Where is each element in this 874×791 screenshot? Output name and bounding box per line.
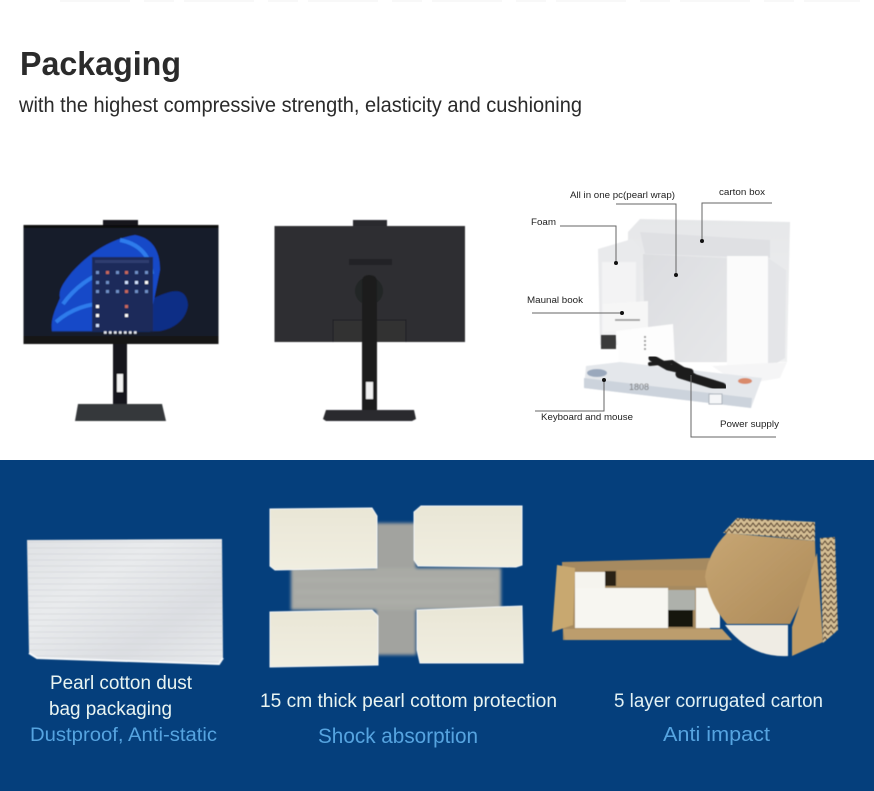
foam blocks bbox=[598, 239, 787, 385]
monitor back view bbox=[274, 220, 465, 421]
callout labels: Power supply bbox=[720, 419, 780, 429]
caption: 15 cm thick pearl cottom protection bbox=[260, 691, 557, 712]
start menu bbox=[92, 257, 153, 331]
callout labels: All in one pc(pearl wrap) bbox=[570, 190, 675, 200]
scan artefact strip bbox=[60, 0, 860, 2]
caption bbox=[30, 673, 217, 746]
item: corrugated carton bbox=[552, 518, 838, 746]
caption bbox=[614, 691, 823, 746]
callout labels: Foam bbox=[531, 217, 556, 227]
item: dust bag bbox=[27, 539, 223, 746]
screen bbox=[24, 225, 218, 344]
caption: Dustproof, Anti-static bbox=[30, 725, 217, 746]
wallpaper bbox=[52, 235, 188, 332]
stand base bbox=[323, 410, 416, 421]
callout labels: carton box bbox=[719, 187, 766, 197]
caption: bag packaging bbox=[49, 699, 172, 720]
carton box bbox=[628, 219, 790, 362]
pearl cotton bag bbox=[27, 539, 223, 664]
stand neck bbox=[113, 343, 127, 407]
title: Packaging bbox=[20, 45, 181, 82]
open carton bbox=[552, 558, 732, 640]
panel: blue protection band bbox=[0, 460, 874, 791]
stand neck bbox=[362, 275, 377, 413]
subtitle: with the highest compressive strength, elasticity and cushioning bbox=[18, 94, 582, 117]
back panel bbox=[274, 226, 465, 342]
callout labels: Keyboard and mouse bbox=[541, 412, 633, 422]
keyboard box: 1808 bbox=[629, 382, 649, 392]
foam blocks bbox=[270, 506, 523, 667]
stand base bbox=[75, 404, 166, 421]
caption bbox=[260, 691, 557, 748]
caption: Anti impact bbox=[663, 724, 770, 746]
monitor front view bbox=[24, 220, 218, 421]
caption: 5 layer corrugated carton bbox=[614, 691, 823, 712]
wrapped pc bbox=[643, 254, 727, 362]
taskbar bbox=[24, 331, 218, 344]
wrap film bbox=[291, 523, 501, 655]
packing contents diagram bbox=[527, 187, 790, 437]
callout labels bbox=[527, 187, 780, 429]
leader dots bbox=[602, 239, 704, 382]
power cable bbox=[650, 358, 722, 387]
manual books bbox=[601, 301, 675, 372]
leader lines bbox=[532, 203, 776, 437]
webcam bbox=[353, 220, 387, 227]
caption: Shock absorption bbox=[318, 725, 478, 748]
caption: Pearl cotton dust bbox=[50, 673, 193, 694]
webcam bbox=[103, 220, 138, 226]
keyboard box bbox=[584, 362, 762, 408]
item: foam corner protection bbox=[260, 506, 557, 748]
magnified corner circle bbox=[705, 518, 838, 656]
callout labels: Maunal book bbox=[527, 295, 584, 305]
